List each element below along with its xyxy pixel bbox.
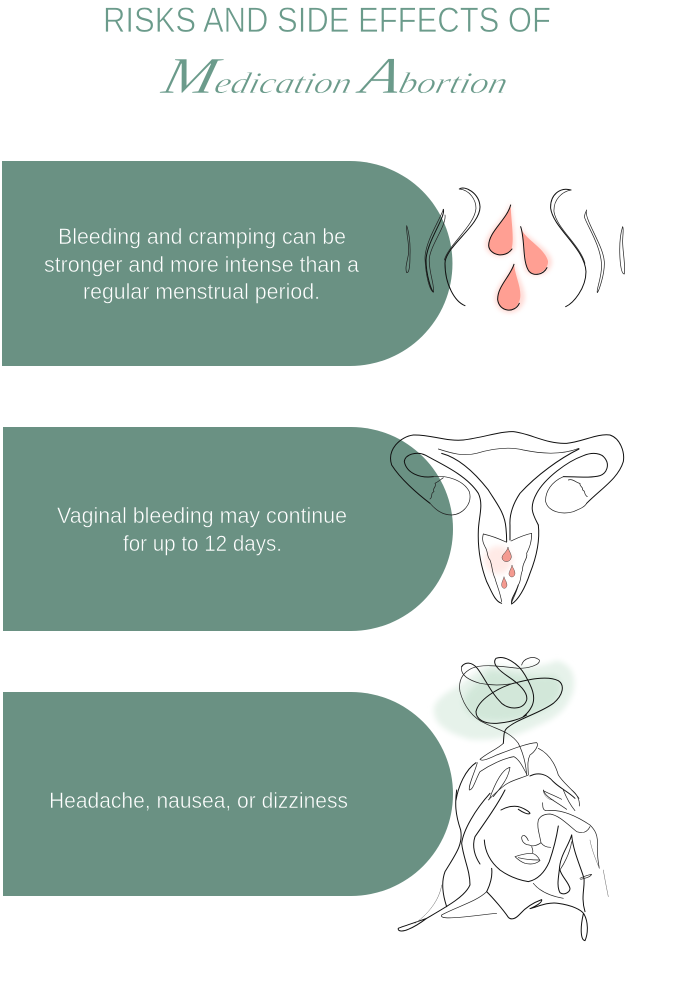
panel text: headache: Headache, nausea, or dizziness: [49, 788, 348, 813]
panel text: vaginal bleeding: Vaginal bleeding may continue: [57, 503, 347, 528]
panel: bleeding and cramping: [2, 161, 452, 366]
green watercolor cloud: [434, 661, 574, 740]
panel text: bleeding: regular menstrual period.: [83, 279, 320, 304]
title: risks and side effects of: RISKS AND SIDE EFFECTS OF: [103, 1, 551, 40]
panel: headache: [3, 692, 453, 896]
panel: vaginal bleeding: [3, 427, 453, 631]
panel text: vaginal bleeding: for up to 12 days.: [123, 531, 282, 556]
panel text: bleeding: Bleeding and cramping can be: [58, 224, 346, 249]
woman top hair: [456, 743, 579, 800]
panel text: bleeding: stronger and more intense than a: [44, 252, 360, 277]
icon: tangled thoughts cloud and woman holding head: [398, 658, 608, 941]
tangled line: [460, 658, 562, 775]
panel text: vaginal bleeding: [57, 503, 347, 556]
title script: medication abortion: Medication Abortion: [156, 48, 516, 105]
panel text: bleeding: [44, 224, 360, 304]
icon: blood drops with waves: [406, 188, 625, 313]
woman face and body: [398, 790, 608, 941]
icon: uterus with blood drops: [391, 432, 624, 604]
